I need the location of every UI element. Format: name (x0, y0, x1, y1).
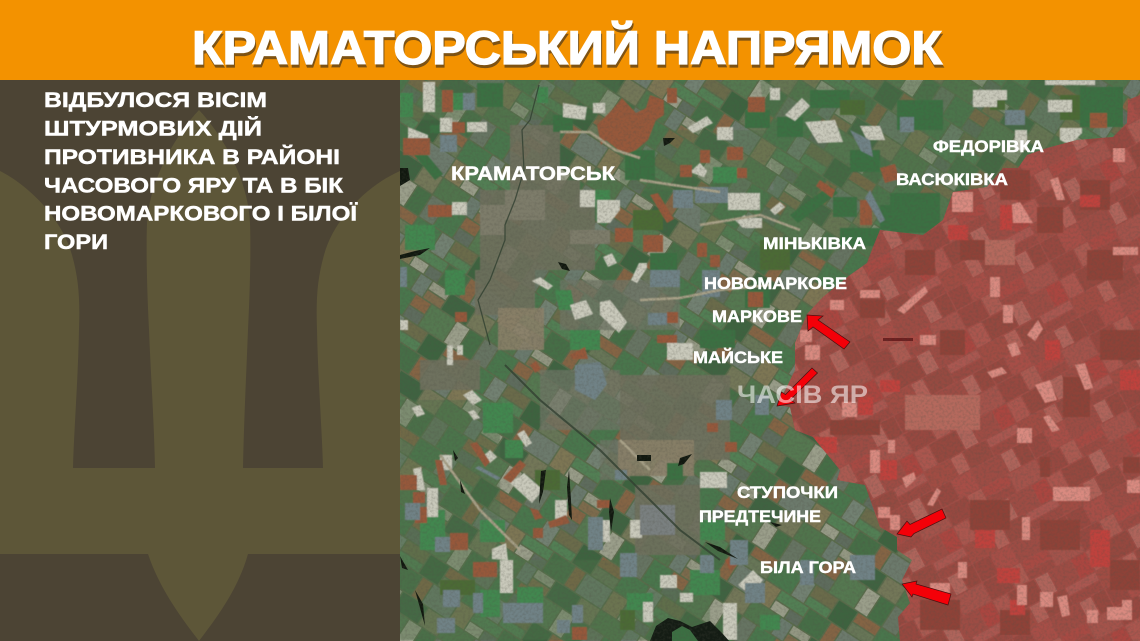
label: Maiske: МАЙСЬКЕ (693, 348, 783, 367)
label: Fedorivka: ФЕДОРІВКА (933, 138, 1044, 156)
bright red patches (813, 195, 1140, 615)
arrow: Bila Hora (902, 581, 951, 605)
label: Kramatorsk: КРАМАТОРСЬК (451, 164, 615, 185)
ravines (440, 132, 800, 550)
dark green fields (410, 83, 1123, 480)
left panel background (0, 80, 400, 641)
label: Minkivka: МІНЬКІВКА (763, 235, 866, 253)
icon: trident emblem (0, 110, 400, 641)
city and quarry (480, 190, 610, 244)
arrow: Markove (807, 315, 850, 349)
label: Chasiv Yar: ЧАСІВ ЯР (737, 381, 868, 409)
text block: summary (44, 88, 358, 254)
trench (883, 338, 913, 341)
header bar (0, 0, 1140, 80)
reservoir (650, 618, 730, 641)
text block: summary: НОВОМАРКОВОГО І БІЛОЇ (44, 202, 358, 226)
white fields (400, 80, 1095, 640)
text block: summary: ПРОТИВНИКА В РАЙОНІ (44, 144, 340, 169)
text block: summary: ГОРИ (44, 230, 108, 254)
map labels (451, 138, 1044, 577)
title: КРАМАТОРСЬКИЙ НАПРЯМОК (192, 21, 942, 74)
grey-blue fields (400, 93, 1025, 633)
pale patches (800, 148, 1140, 623)
rivers and ponds (478, 85, 720, 560)
speckle texture (400, 80, 1140, 641)
text block: summary: ЧАСОВОГО ЯРУ ТА В БІК (44, 174, 344, 198)
text block: summary: ШТУРМОВИХ ДІЙ (44, 116, 262, 140)
label: Bila Hora: БІЛА ГОРА (760, 559, 856, 577)
label: Markove: МАРКОВЕ (712, 308, 802, 326)
satellite map (400, 80, 1140, 641)
occupied zone (770, 80, 1140, 641)
label: Stupochky: СТУПОЧКИ (737, 484, 838, 502)
darker patches (830, 170, 1140, 635)
label: Novomarkove: НОВОМАРКОВЕ (704, 275, 847, 293)
broad tones (400, 80, 1100, 640)
label: Vasiukivka: ВАСЮКІВКА (896, 171, 1008, 189)
text block: summary: ВІДБУЛОСЯ ВІСІМ (44, 88, 267, 112)
brown fields (400, 88, 1107, 640)
arrow: Chasiv Yar (777, 368, 818, 406)
label: Predtechyne: ПРЕДТЕЧИНЕ (699, 508, 821, 526)
arrow: Stupochky (897, 509, 946, 537)
